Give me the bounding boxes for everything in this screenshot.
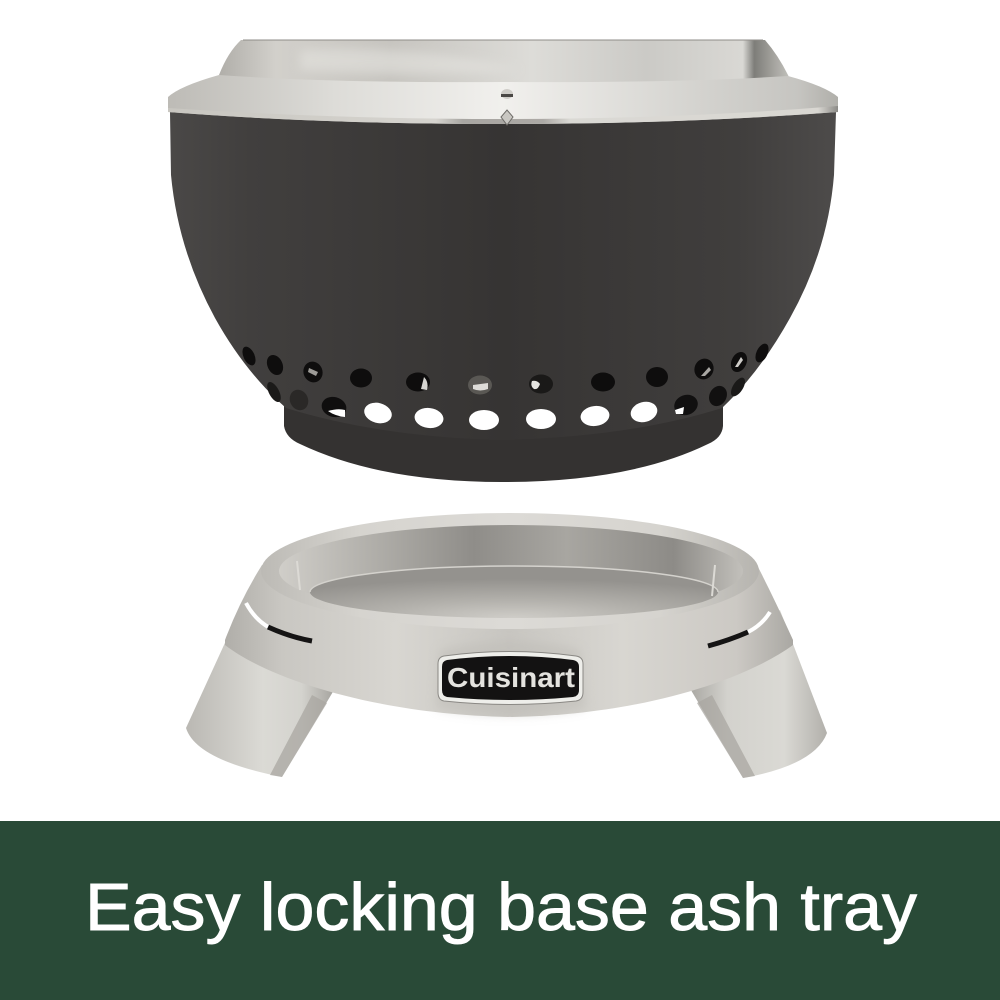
caption text: Easy locking base ash tray: [85, 870, 918, 945]
badge recess: [436, 641, 586, 715]
Cuisinart badge: Cuisinart: [447, 662, 575, 693]
upper row of vent holes: [240, 342, 771, 394]
locking base stand: [186, 513, 827, 778]
lid sheen: [300, 49, 520, 74]
lid screw: [501, 89, 513, 99]
right vent slot: [748, 612, 770, 632]
right leg: [685, 610, 827, 778]
stand ring body: [225, 528, 793, 717]
brim lip: [168, 106, 838, 124]
brim screw: [501, 110, 513, 125]
bowl foot: [284, 400, 723, 482]
black bowl body: [170, 112, 836, 440]
tray clips: [297, 561, 715, 596]
fire bowl: [168, 40, 838, 482]
stainless lid dome: [219, 40, 788, 88]
Cuisinart badge: [438, 652, 583, 704]
ring upper rim: [261, 513, 759, 629]
left vent slot: [246, 603, 270, 628]
stainless brim: [168, 75, 838, 124]
ash tray pan: [310, 566, 718, 618]
left leg: [186, 610, 340, 777]
ash tray inner wall: [279, 525, 743, 617]
right leg facet: [697, 695, 755, 778]
caption banner: [0, 821, 1000, 1000]
left leg facet: [270, 695, 327, 777]
lower row of vent holes: [264, 375, 748, 430]
